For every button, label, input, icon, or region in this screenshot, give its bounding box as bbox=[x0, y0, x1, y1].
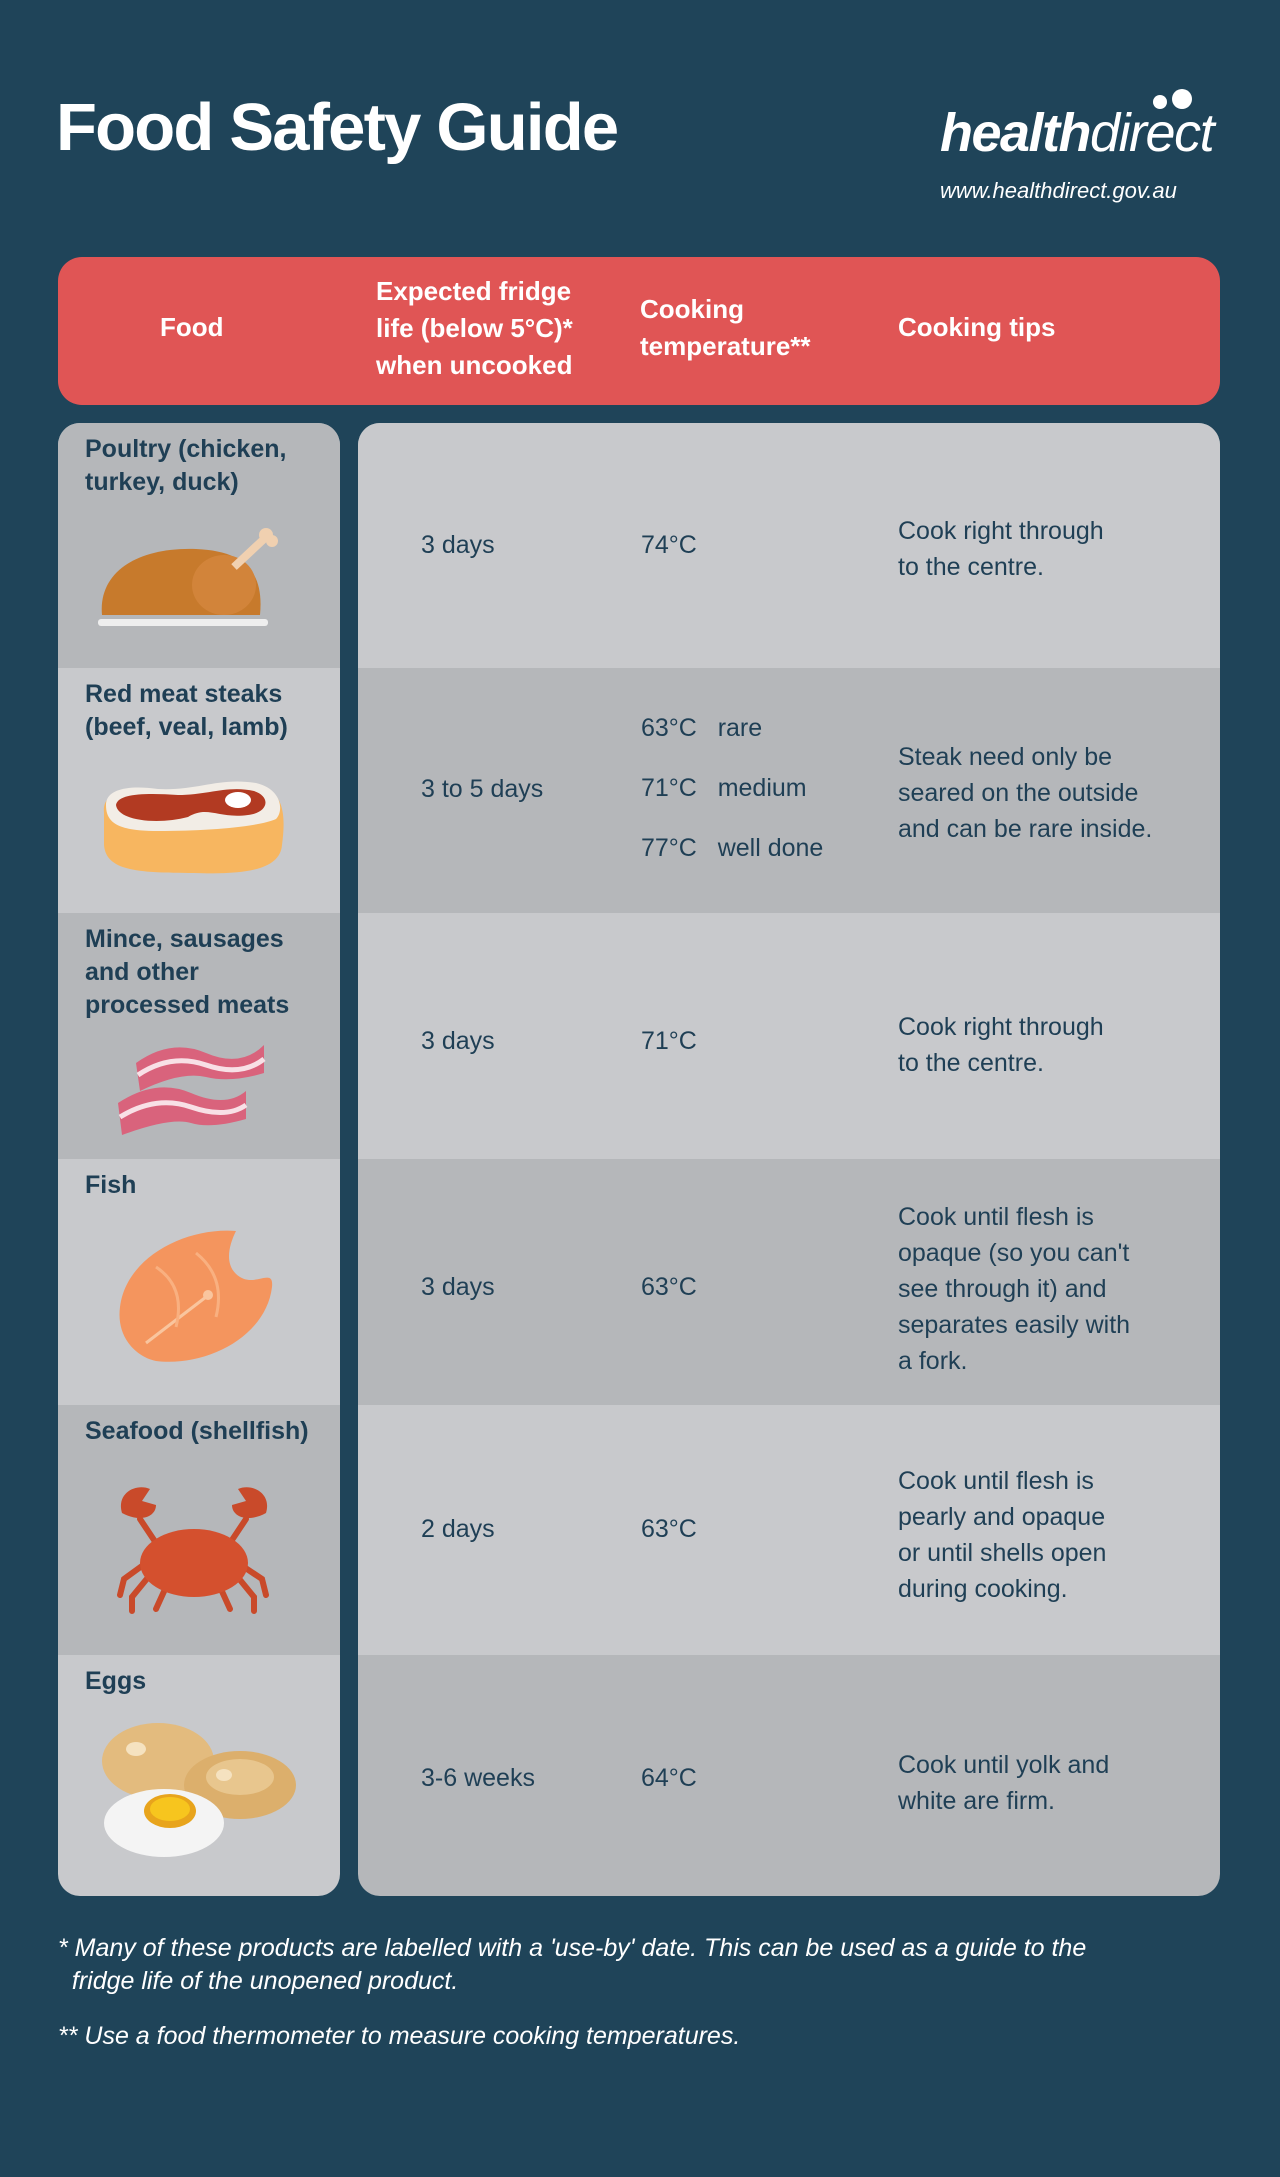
food: seafood: Seafood (shellfish) bbox=[85, 1417, 309, 1445]
logo: healthdirect bbox=[940, 89, 1216, 203]
header: cooking temperature: Cooking bbox=[640, 294, 744, 324]
logo wordmark: healthdirect bbox=[940, 103, 1213, 163]
row: seafood bbox=[358, 1405, 1220, 1655]
row: processed meats: 71°C bbox=[641, 1027, 697, 1055]
header: fridge life: Expected fridge bbox=[376, 276, 571, 306]
row: red meat: 71°C medium bbox=[641, 774, 807, 802]
row: fish: 3 days bbox=[421, 1273, 495, 1301]
website url: www.healthdirect.gov.au bbox=[940, 178, 1177, 203]
row: poultry: Cook right through bbox=[898, 517, 1104, 545]
food: processed meats: processed meats bbox=[85, 991, 289, 1019]
food: processed meats: and other bbox=[85, 958, 199, 986]
row: eggs: Cook until yolk and bbox=[898, 1751, 1109, 1779]
food: red meat bbox=[85, 680, 288, 874]
row: poultry: to the centre. bbox=[898, 553, 1044, 581]
row: poultry: 74°C bbox=[641, 531, 697, 559]
footnote: use-by: fridge life of the unopened product. bbox=[72, 1967, 458, 1995]
row: eggs bbox=[421, 1751, 1109, 1815]
right data panel bbox=[358, 423, 1220, 1896]
row: poultry bbox=[358, 423, 1220, 668]
food: poultry: Poultry (chicken, bbox=[85, 435, 286, 463]
row: processed meats: to the centre. bbox=[898, 1049, 1044, 1077]
left food column bbox=[58, 423, 340, 1896]
food: poultry: turkey, duck) bbox=[85, 468, 239, 496]
header: cooking temperature: temperature** bbox=[640, 331, 811, 361]
food: fish: Fish bbox=[85, 1171, 136, 1199]
row: fish: see through it) and bbox=[898, 1275, 1106, 1303]
footnote: thermometer: ** Use a food thermometer to measure cooking temperatures. bbox=[58, 2022, 740, 2050]
header: food: Food bbox=[160, 312, 224, 342]
row: seafood: pearly and opaque bbox=[898, 1503, 1105, 1531]
food: processed meats bbox=[58, 913, 340, 1159]
row: red meat: seared on the outside bbox=[898, 779, 1138, 807]
row: seafood: or until shells open bbox=[898, 1539, 1106, 1567]
header: fridge life: when uncooked bbox=[376, 350, 572, 380]
row: fish bbox=[421, 1203, 1130, 1375]
food: processed meats: Mince, sausages bbox=[85, 925, 284, 953]
logo dots bbox=[1153, 89, 1192, 109]
icon: steak bbox=[104, 782, 284, 874]
row: red meat: 77°C well done bbox=[641, 834, 823, 862]
row: poultry: 3 days bbox=[421, 531, 495, 559]
row: fish: a fork. bbox=[898, 1347, 967, 1375]
row: fish: separates easily with bbox=[898, 1311, 1130, 1339]
row: processed meats: Cook right through bbox=[898, 1013, 1104, 1041]
row: fish: 63°C bbox=[641, 1273, 697, 1301]
header: cooking tips: Cooking tips bbox=[898, 312, 1055, 342]
food: red meat: (beef, veal, lamb) bbox=[85, 713, 288, 741]
icon: roast chicken bbox=[98, 528, 278, 626]
row: processed meats bbox=[358, 913, 1220, 1159]
row: seafood: 63°C bbox=[641, 1515, 697, 1543]
row: eggs: 64°C bbox=[641, 1764, 697, 1792]
food: seafood bbox=[58, 1405, 340, 1655]
row: red meat: 63°C rare bbox=[641, 714, 762, 742]
icon: crab bbox=[117, 1487, 269, 1614]
row: red meat bbox=[421, 714, 1152, 862]
row: seafood: Cook until flesh is bbox=[898, 1467, 1094, 1495]
row: seafood: during cooking. bbox=[898, 1575, 1068, 1603]
row: eggs: white are firm. bbox=[898, 1787, 1055, 1815]
header bar bbox=[58, 257, 1220, 405]
header: fridge life bbox=[376, 276, 573, 380]
icon: eggs bbox=[102, 1723, 296, 1857]
food: red meat: Red meat steaks bbox=[85, 680, 282, 708]
food: fish bbox=[85, 1171, 272, 1362]
row: red meat: Steak need only be bbox=[898, 743, 1112, 771]
row: fish: opaque (so you can't bbox=[898, 1239, 1129, 1267]
footnote: use-by bbox=[58, 1934, 1086, 1995]
title: Food Safety Guide bbox=[56, 90, 617, 165]
header: cooking temperature bbox=[640, 294, 811, 361]
food: eggs: Eggs bbox=[85, 1667, 146, 1695]
row: fish: Cook until flesh is bbox=[898, 1203, 1094, 1231]
header: fridge life: life (below 5°C)* bbox=[376, 313, 573, 343]
food: poultry bbox=[58, 423, 340, 668]
food: eggs bbox=[85, 1667, 296, 1857]
row: red meat: and can be rare inside. bbox=[898, 815, 1152, 843]
row: processed meats: 3 days bbox=[421, 1027, 495, 1055]
row: seafood: 2 days bbox=[421, 1515, 495, 1543]
row: eggs: 3-6 weeks bbox=[421, 1764, 535, 1792]
icon: bacon bbox=[118, 1045, 266, 1135]
footnote: use-by: * Many of these products are labelled with a 'use-by' date. This can be used as a guide to the bbox=[58, 1934, 1086, 1962]
row: red meat: 3 to 5 days bbox=[421, 775, 543, 803]
icon: salmon steak bbox=[120, 1230, 272, 1362]
